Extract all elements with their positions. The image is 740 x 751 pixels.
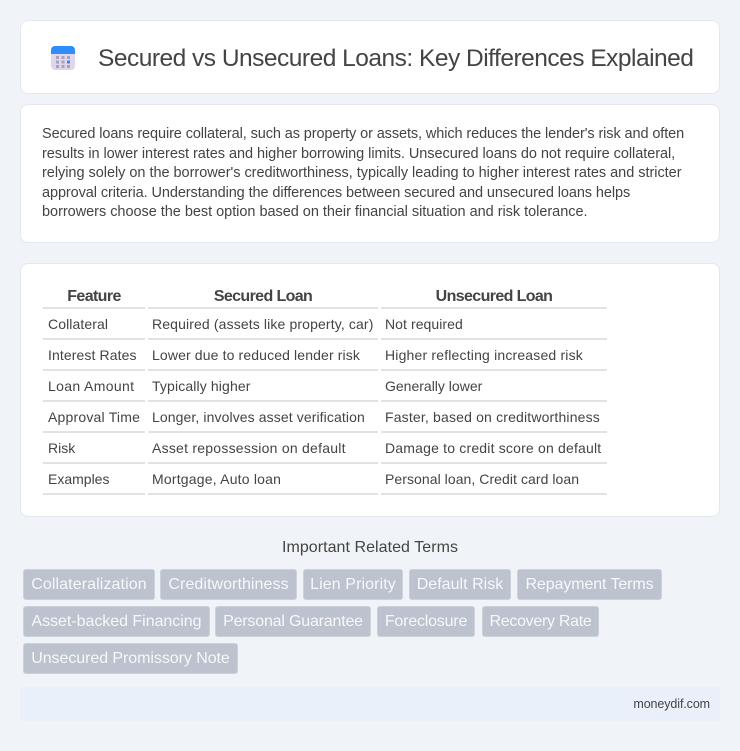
related term tags: Collateralization: [31, 576, 147, 593]
description text: results in lower interest rates and higher borrowing limits. Unsecured loans do not require collateral,: [42, 146, 675, 162]
description text: borrowers choose the best option based on their financial situation and risk tolerance.: [42, 204, 588, 220]
comparison table: Faster, based on creditworthiness: [385, 409, 600, 425]
heading: related terms: Important Related Terms: [282, 539, 458, 556]
related term tags: Lien Priority: [310, 576, 396, 593]
icon: calendar: [51, 46, 75, 70]
comparison table: Secured Loan: [214, 288, 312, 305]
comparison table: Approval Time: [48, 409, 140, 425]
comparison table: Not required: [385, 316, 463, 332]
related term tags: Foreclosure: [385, 613, 467, 630]
footer bar: [20, 687, 720, 721]
header card: [20, 20, 720, 94]
panel: description: [20, 104, 720, 243]
comparison table: Typically higher: [152, 378, 251, 394]
comparison table: Higher reflecting increased risk: [385, 347, 583, 363]
related term tags: Recovery Rate: [490, 613, 591, 630]
comparison table: Examples: [48, 471, 109, 487]
comparison table: Unsecured Loan: [436, 288, 552, 305]
description text: approval criteria. Understanding the differences between secured and unsecured loans helps: [42, 184, 630, 200]
comparison table: Generally lower: [385, 378, 482, 394]
description text: [42, 126, 684, 220]
comparison table: Interest Rates: [48, 347, 137, 363]
comparison table: Longer, involves asset verification: [152, 409, 365, 425]
comparison table: Risk: [48, 440, 75, 456]
related term tags: Asset-backed Financing: [31, 613, 202, 630]
comparison table: Asset repossession on default: [152, 440, 346, 456]
comparison table: Mortgage, Auto loan: [152, 471, 281, 487]
comparison table: Lower due to reduced lender risk: [152, 347, 360, 363]
related term tags: Creditworthiness: [168, 576, 289, 593]
description text: Secured loans require collateral, such as property or assets, which reduces the lender's risk and often: [42, 126, 684, 142]
footer source: moneydif.com: [633, 697, 710, 711]
comparison table: Personal loan, Credit card loan: [385, 471, 579, 487]
title: Secured vs Unsecured Loans: Key Differences Explained: [98, 45, 693, 72]
related term tags: Default Risk: [417, 576, 503, 593]
comparison table: Loan Amount: [48, 378, 134, 394]
related term tags: Personal Guarantee: [223, 613, 363, 630]
related term tags: Repayment Terms: [525, 576, 654, 593]
description text: relying solely on the borrower's creditworthiness, typically leading to higher interest rates and stricter: [42, 165, 682, 181]
comparison table: Damage to credit score on default: [385, 440, 601, 456]
panel: comparison table: [20, 263, 720, 517]
comparison table: Feature: [67, 288, 121, 305]
related term tags: Unsecured Promissory Note: [31, 650, 230, 667]
comparison table: Required (assets like property, car): [152, 316, 374, 332]
comparison table: Collateral: [48, 316, 108, 332]
